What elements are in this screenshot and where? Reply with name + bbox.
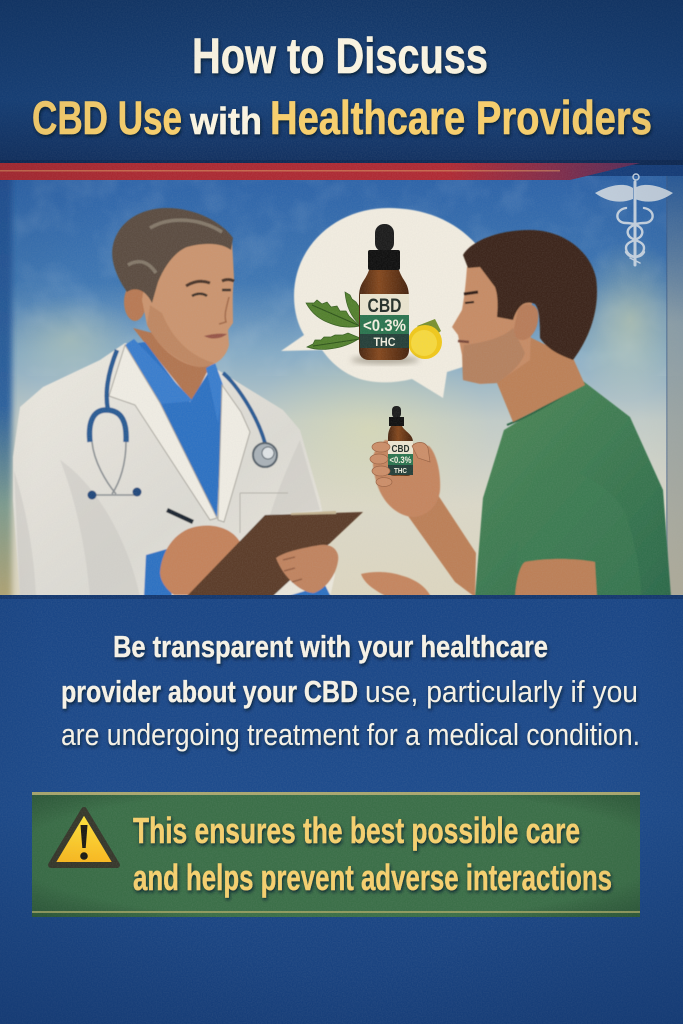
patient face	[452, 255, 532, 384]
illustration: cannabis leaves	[306, 292, 360, 349]
clipboard	[187, 512, 363, 596]
illustration: small CBD bottle: THC	[394, 466, 407, 475]
patient hair	[463, 230, 597, 360]
doctor ear	[124, 283, 146, 321]
body text: use, particularly if you	[365, 674, 638, 709]
patient ear	[514, 304, 538, 340]
doctor holding hand	[276, 545, 338, 593]
illustration: large CBD bottle: <0.3%	[363, 316, 406, 335]
illustration: small CBD bottle: CBD	[392, 444, 410, 455]
doctor blue shirt	[125, 342, 222, 518]
title: How to Discuss	[192, 28, 488, 84]
body text	[61, 629, 640, 752]
illustration: lemon	[408, 319, 442, 359]
illustration: small CBD bottle	[388, 406, 413, 476]
callout text	[133, 810, 612, 898]
illustration: small CBD bottle: <0.3%	[390, 455, 412, 466]
doctor face	[142, 237, 234, 367]
patient green t-shirt	[475, 381, 671, 597]
body text: Be transparent with your healthcare	[113, 629, 548, 664]
doctor lapels	[109, 345, 250, 522]
illustration: large CBD bottle	[351, 224, 419, 364]
coat pocket	[240, 493, 288, 533]
doctor hair	[112, 208, 233, 303]
doctor sleeve cuff	[144, 549, 172, 597]
patient fingers	[370, 442, 430, 486]
icon: warning triangle	[51, 810, 117, 865]
illustration scene panel	[0, 170, 683, 600]
title: with	[189, 101, 262, 143]
lower panel background	[0, 597, 683, 1024]
callout: green notice	[32, 792, 640, 917]
body text: provider about your CBD	[61, 674, 358, 709]
patient lower hand	[361, 572, 431, 597]
illustration: large CBD bottle: THC	[374, 335, 396, 349]
doctor writing hand	[160, 526, 240, 595]
patient neck	[497, 330, 585, 422]
speech bubble	[281, 208, 476, 398]
illustration: large CBD bottle: CBD	[368, 296, 402, 317]
illustration: patient	[361, 230, 671, 597]
doctor neck	[133, 328, 213, 402]
doctor stethoscope	[88, 350, 277, 500]
patient forearm	[408, 492, 476, 597]
title	[32, 28, 652, 144]
doctor pen	[167, 510, 193, 522]
patient holding hand	[373, 440, 440, 517]
illustration: doctor	[13, 208, 363, 597]
red ribbon band	[0, 160, 683, 180]
doctor lab coat	[13, 343, 335, 597]
patient facial features	[464, 292, 478, 294]
divider line	[0, 595, 683, 599]
header panel background	[0, 0, 683, 165]
title: CBD Use	[32, 91, 182, 144]
patient lower arm	[515, 559, 597, 597]
icon: caduceus	[595, 174, 673, 265]
doctor facial features	[186, 280, 234, 286]
